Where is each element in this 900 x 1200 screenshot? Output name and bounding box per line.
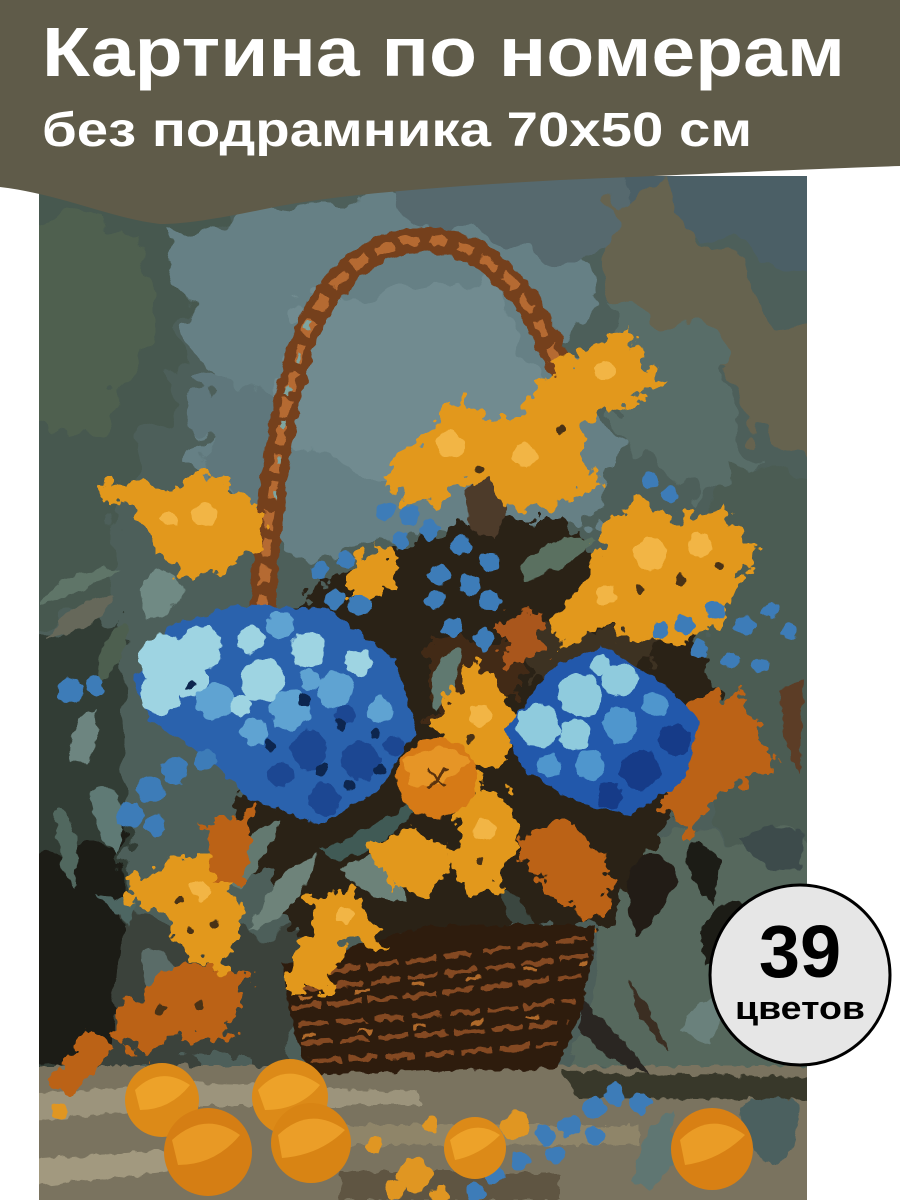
mimosa highlights and gaps <box>155 360 724 1015</box>
header banner <box>0 0 900 224</box>
leaves <box>40 475 805 1190</box>
hydrangea: right <box>505 645 700 815</box>
subtitle: без подрамника 70х50 см <box>42 104 752 157</box>
scattered blossoms on table <box>52 1102 529 1200</box>
mimosa shadows <box>48 692 778 1088</box>
blue berries <box>57 472 798 1200</box>
table <box>20 1066 820 1200</box>
painting background <box>39 176 807 1069</box>
title: Картина по номерам <box>42 13 845 91</box>
basket handle <box>262 240 560 612</box>
badge: 39 colours: цветов <box>735 990 865 1026</box>
painting: basket of flowers <box>39 176 807 1200</box>
badge: 39 colours: 39 <box>759 910 841 993</box>
dark foliage mass <box>235 520 735 940</box>
hydrangea: left <box>132 605 417 825</box>
mimosa sprays <box>98 328 762 990</box>
basket <box>283 925 595 1075</box>
oranges on table <box>125 1059 753 1196</box>
badge: 39 colours <box>710 885 890 1065</box>
orange in bouquet <box>397 738 477 818</box>
